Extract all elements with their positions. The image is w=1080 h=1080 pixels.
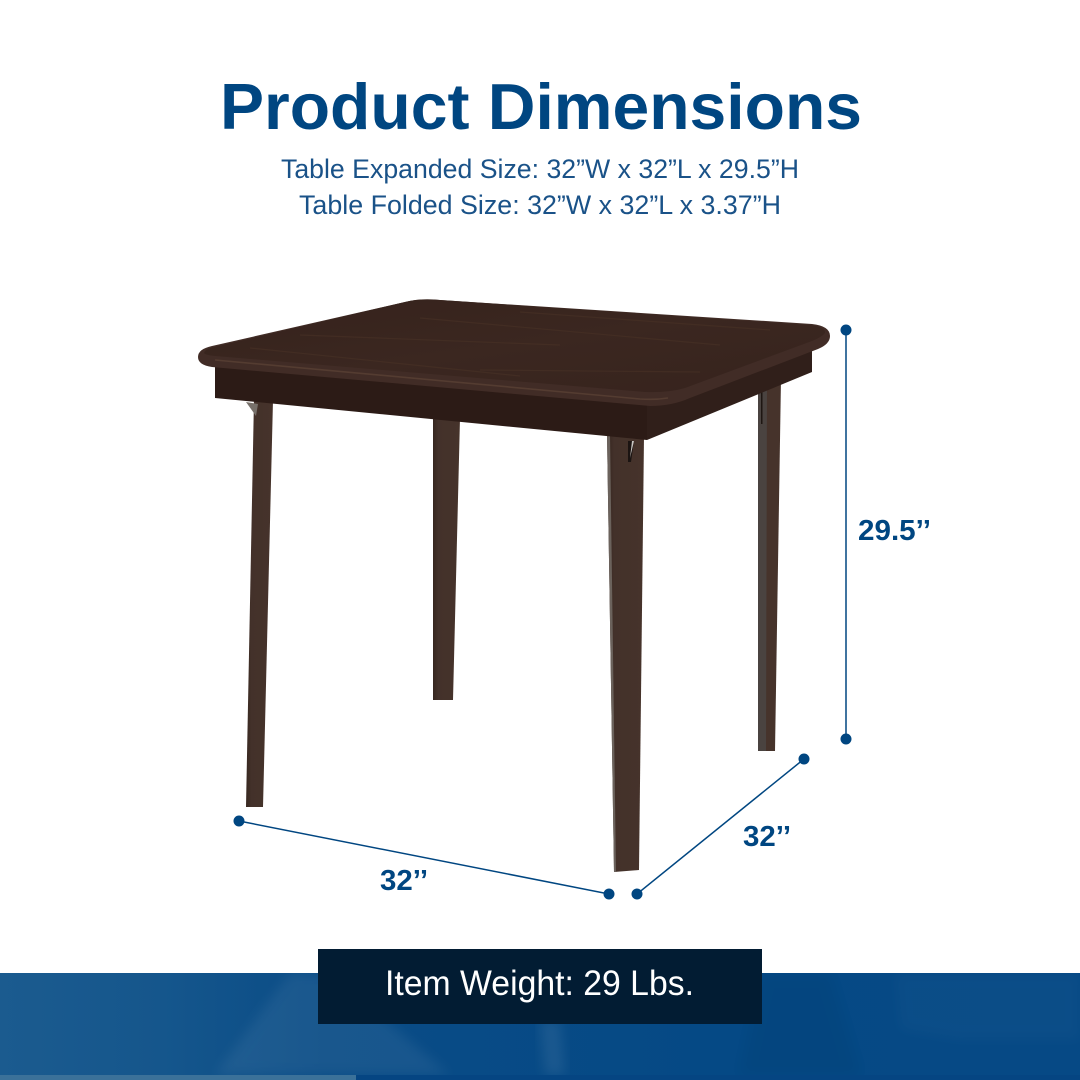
product image: folding table (198, 299, 830, 872)
dimension: width (234, 816, 614, 899)
subtitle: expanded and folded sizes (281, 154, 799, 220)
weight callout: Item Weight: 29 Lbs. (385, 964, 694, 1003)
label: height: 29.5’’ (858, 515, 931, 547)
dimension: height (841, 325, 851, 744)
back middle leg (433, 415, 460, 700)
table top edge (198, 299, 830, 406)
dimension: length (632, 754, 809, 899)
front leg (607, 434, 644, 872)
back right leg (758, 378, 781, 751)
weight callout (318, 949, 762, 1024)
footer band (0, 973, 1080, 1080)
wood grain (250, 312, 770, 376)
apron (215, 345, 812, 440)
edge highlight (215, 360, 668, 399)
subtitle: expanded and folded sizes: Table Folded Size: 32”W x 32”L x 3.37”H (299, 190, 781, 220)
label: width: 32’’ (380, 865, 428, 897)
subtitle: expanded and folded sizes: Table Expanded Size: 32”W x 32”L x 29.5”H (281, 154, 799, 184)
table top surface (204, 299, 825, 392)
label: length: 32’’ (743, 821, 791, 853)
back left leg (246, 398, 273, 807)
hinge brackets (246, 402, 634, 462)
title: Product Dimensions (220, 70, 862, 143)
